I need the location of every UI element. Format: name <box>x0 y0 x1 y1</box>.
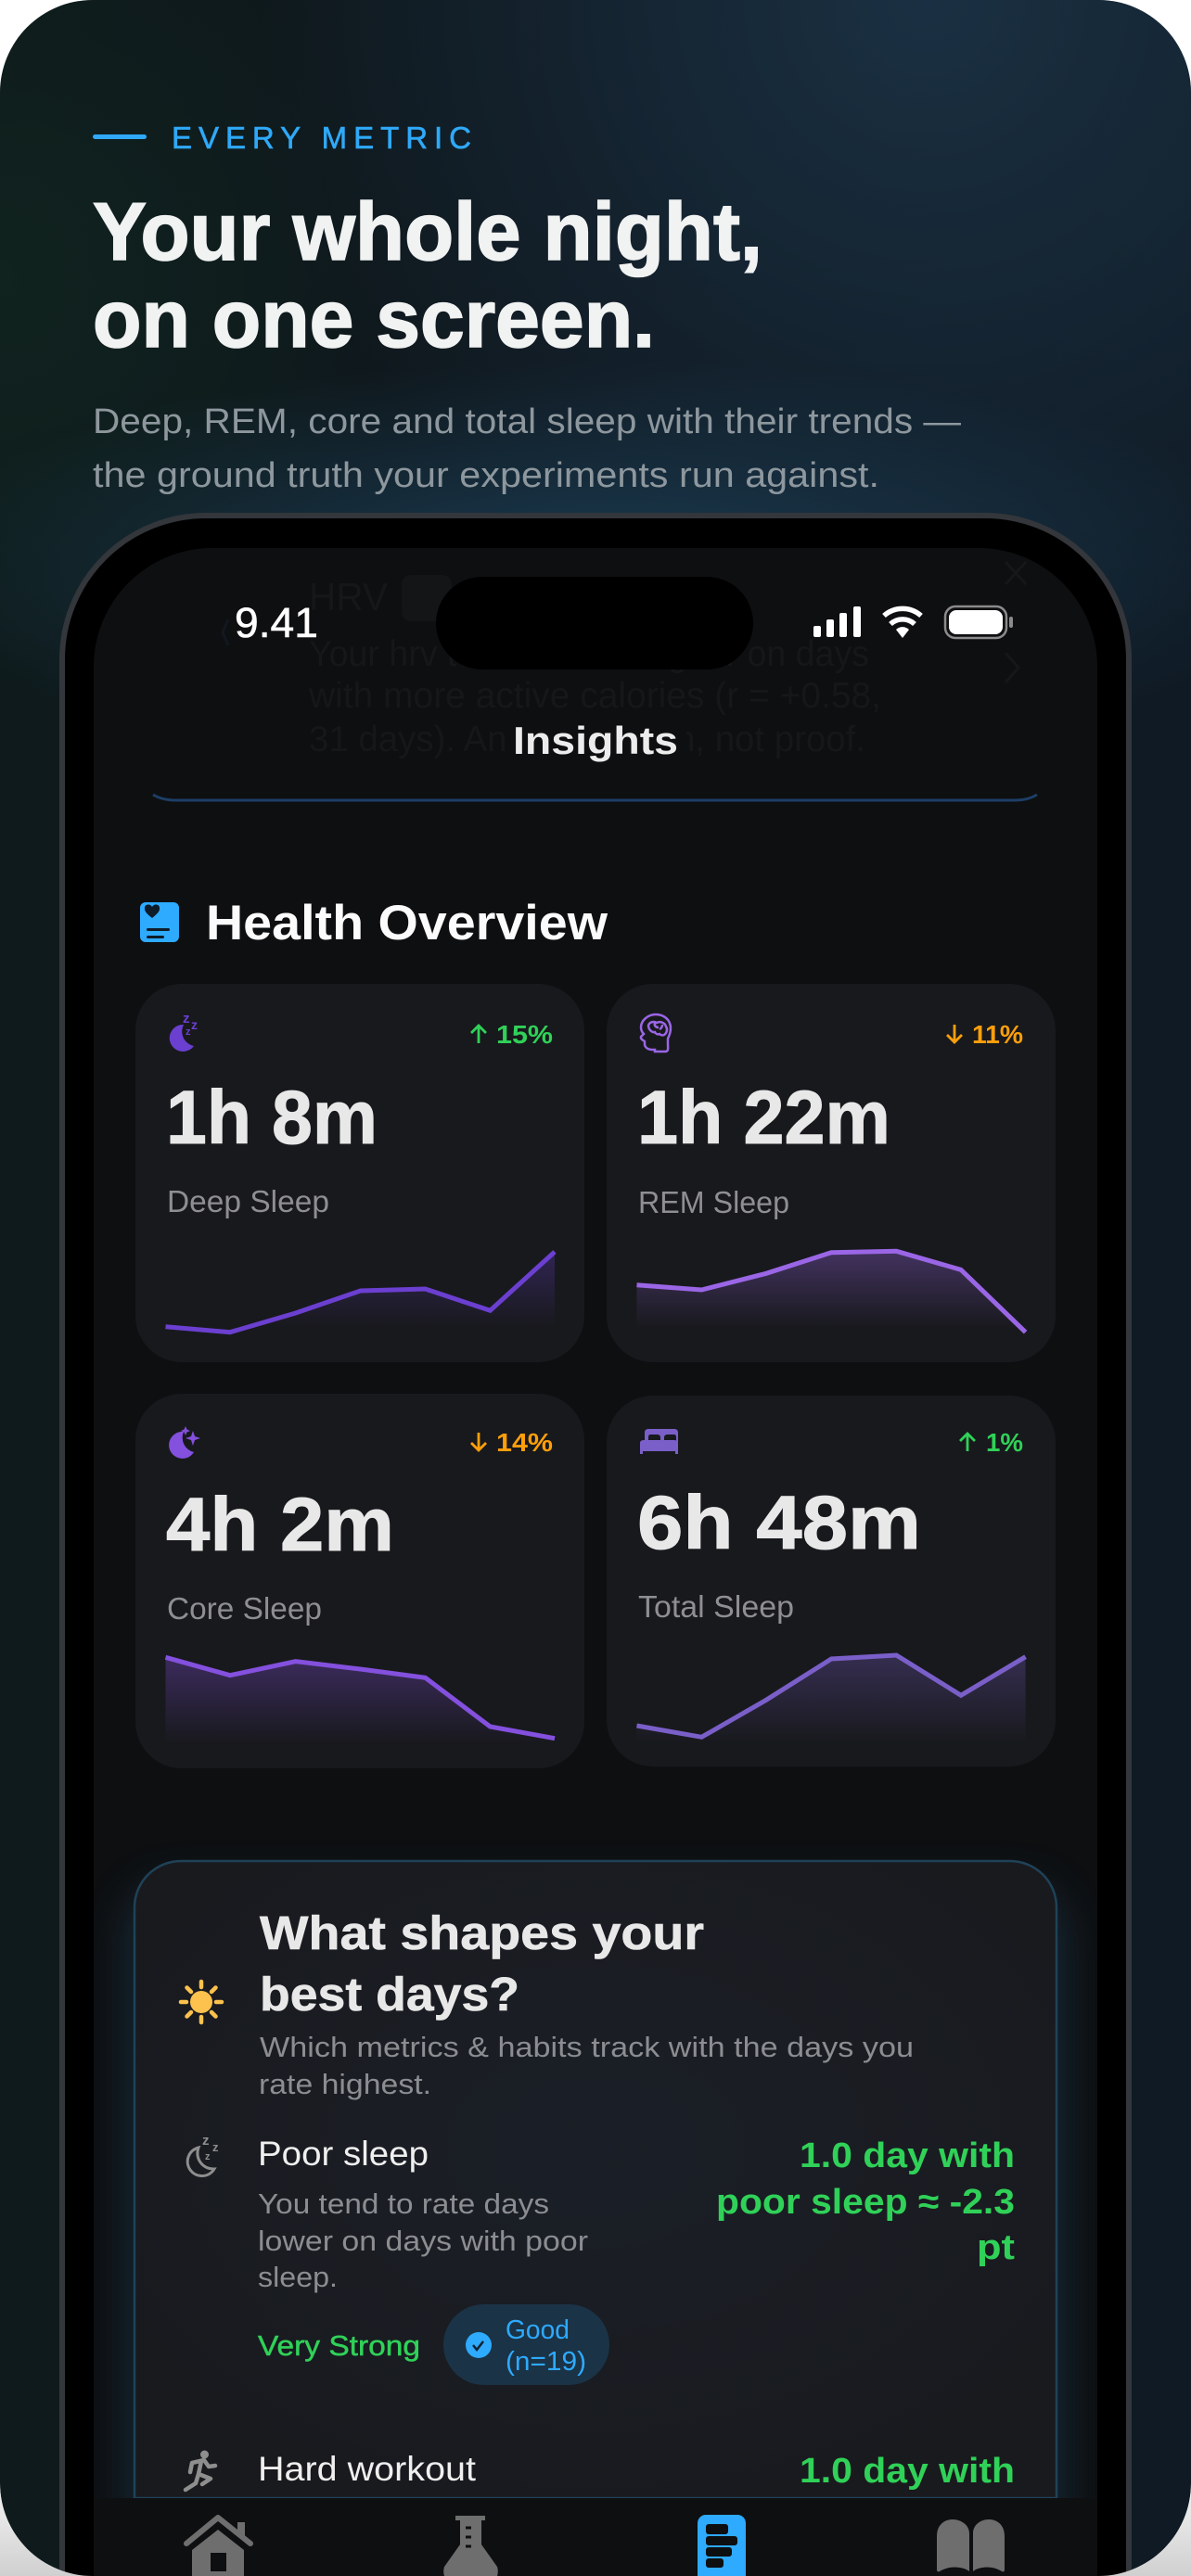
icon: runner <box>186 2450 215 2490</box>
status time: 9.41 <box>235 599 318 646</box>
trend: up 1% <box>959 1432 1022 1452</box>
insight: hard workout: 1.0 day with <box>800 2452 1015 2491</box>
trend: down 14%: 14% <box>496 1428 553 1457</box>
icon: moon zzz: z <box>186 1027 191 1038</box>
glow around insight card <box>124 1882 1067 2576</box>
confidence pill <box>443 2304 609 2385</box>
phone mockup <box>62 516 1129 2576</box>
insight: hard workout: Hard workout <box>258 2450 477 2488</box>
factor description: You tend to rate days <box>258 2187 549 2220</box>
icon: outline moon: z <box>202 2133 210 2149</box>
faded scrolled card behind header: Your hrv tends to run higher on days <box>309 634 869 674</box>
status icons <box>813 606 1013 638</box>
section title: best days? <box>260 1968 519 2021</box>
sparkline <box>636 1251 1026 1333</box>
heading <box>93 185 762 364</box>
icon: bed <box>640 1429 678 1454</box>
effect size <box>716 2136 1015 2267</box>
card bottom edge <box>153 795 1037 800</box>
icon: moon zzz: z <box>183 1011 189 1027</box>
confidence pill: (n=19) <box>506 2347 586 2377</box>
nav title: Insights <box>513 719 678 762</box>
section subtitle: Which metrics & habits track with the days you <box>260 2031 914 2063</box>
phone screen <box>94 548 1097 2576</box>
section title: What shapes your <box>260 1906 704 1959</box>
heading: Your whole night, <box>93 185 762 277</box>
metric card: rem sleep <box>607 984 1056 1362</box>
trend: up 1%: 1% <box>986 1428 1023 1457</box>
sparkline <box>165 1252 555 1340</box>
section title <box>260 1906 704 2021</box>
metric card: total sleep <box>607 1396 1056 1766</box>
factor description: lower on days with poor <box>258 2225 588 2257</box>
faded scrolled card behind header: HRV <box>309 575 388 618</box>
icon: sun <box>181 1982 222 2022</box>
trend: up 15%: 15% <box>496 1020 553 1049</box>
insight: hard workout <box>186 2450 1015 2491</box>
sparkline <box>165 1657 555 1748</box>
value: 1h 8m <box>166 1076 378 1160</box>
label: Total Sleep <box>638 1589 794 1624</box>
eyebrow: every metric: EVERY METRIC <box>172 121 471 155</box>
faded scrolled card behind header: with more active calories (r = +0.58, <box>308 676 881 716</box>
insight: poor sleep <box>187 2133 1015 2385</box>
effect size: poor sleep ≈ -2.3 <box>716 2183 1015 2222</box>
label: Core Sleep <box>167 1591 322 1626</box>
tab icon: flask <box>443 2516 498 2576</box>
factor name: Poor sleep <box>258 2135 429 2173</box>
tab bar <box>94 2498 1097 2576</box>
value: 6h 48m <box>637 1481 921 1565</box>
icon: moon zzz <box>169 1015 197 1052</box>
panel: what shapes your best days <box>134 1861 1057 2498</box>
metric card: deep sleep <box>135 984 584 1362</box>
label: Deep Sleep <box>167 1184 329 1218</box>
trend: down 14% <box>470 1433 553 1452</box>
strength label: Very Strong <box>258 2329 420 2362</box>
dynamic island <box>436 577 753 670</box>
trend: down 11%: 11% <box>972 1020 1023 1049</box>
faded scrolled card behind header <box>221 619 229 645</box>
factor description: sleep. <box>258 2261 338 2293</box>
subheading: the ground truth your experiments run against. <box>93 456 879 495</box>
subheading: Deep, REM, core and total sleep with their trends — <box>93 402 961 441</box>
icon: outline moon: z <box>205 2151 211 2162</box>
health overview heading: Health Overview <box>206 896 608 950</box>
tab icon: insights active <box>698 2515 746 2576</box>
section subtitle <box>259 2031 914 2100</box>
value: 1h 22m <box>637 1076 890 1160</box>
icon: brain head <box>641 1014 671 1052</box>
icon: moon zzz: z <box>191 1017 198 1032</box>
label: REM Sleep <box>638 1185 789 1219</box>
icon: health card <box>140 902 179 942</box>
section subtitle: rate highest. <box>259 2068 431 2100</box>
sparkline <box>636 1655 1026 1748</box>
icon: outline moon <box>187 2133 219 2176</box>
page corner mask <box>0 2483 1191 2576</box>
effect size: 1.0 day with <box>800 2136 1015 2175</box>
metric card: core sleep <box>135 1394 584 1768</box>
trend: down 11% <box>946 1025 1022 1044</box>
effect size: pt <box>977 2228 1015 2267</box>
tab icon: home <box>186 2518 250 2576</box>
tab icon: book <box>937 2519 1005 2571</box>
subheading <box>93 402 961 495</box>
icon: moon stars <box>169 1426 200 1459</box>
value: 4h 2m <box>166 1483 394 1567</box>
health overview heading <box>140 902 608 942</box>
trend: up 15% <box>470 1024 553 1044</box>
heading: on one screen. <box>93 273 655 364</box>
confidence pill: Good <box>506 2315 570 2345</box>
factor description <box>258 2187 588 2293</box>
faded scrolled card behind header: 31 days). An association, not proof. <box>309 720 865 759</box>
icon: outline moon: z <box>212 2140 219 2154</box>
